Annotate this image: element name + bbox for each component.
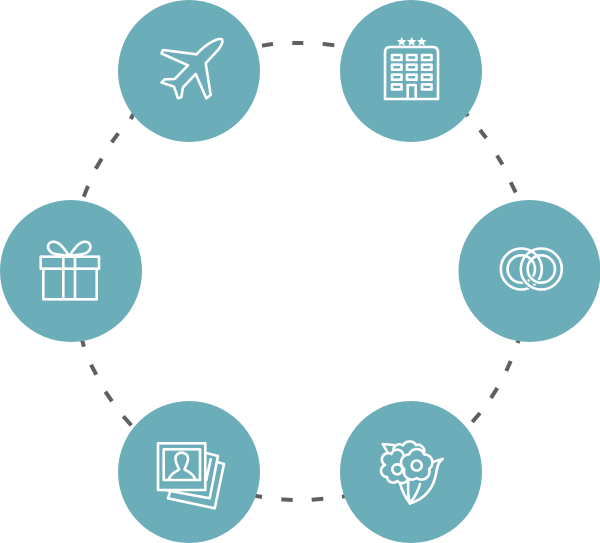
icon: three stars bbox=[397, 37, 426, 46]
icon: flower bouquet bbox=[381, 441, 443, 504]
node: photographs bbox=[118, 401, 260, 543]
icon: hotel building bbox=[385, 47, 438, 99]
icon: airplane bbox=[162, 39, 222, 98]
icon: stack of photos bbox=[158, 443, 224, 508]
node: hotel bbox=[340, 0, 482, 142]
node: wedding rings bbox=[458, 200, 600, 342]
icon: interlocked rings bbox=[501, 248, 562, 290]
node: airplane bbox=[118, 0, 260, 142]
node: bouquet bbox=[340, 401, 482, 543]
node: gift bbox=[0, 200, 142, 342]
dashed connecting ring bbox=[82, 43, 519, 500]
icon: gift box bbox=[41, 242, 99, 299]
